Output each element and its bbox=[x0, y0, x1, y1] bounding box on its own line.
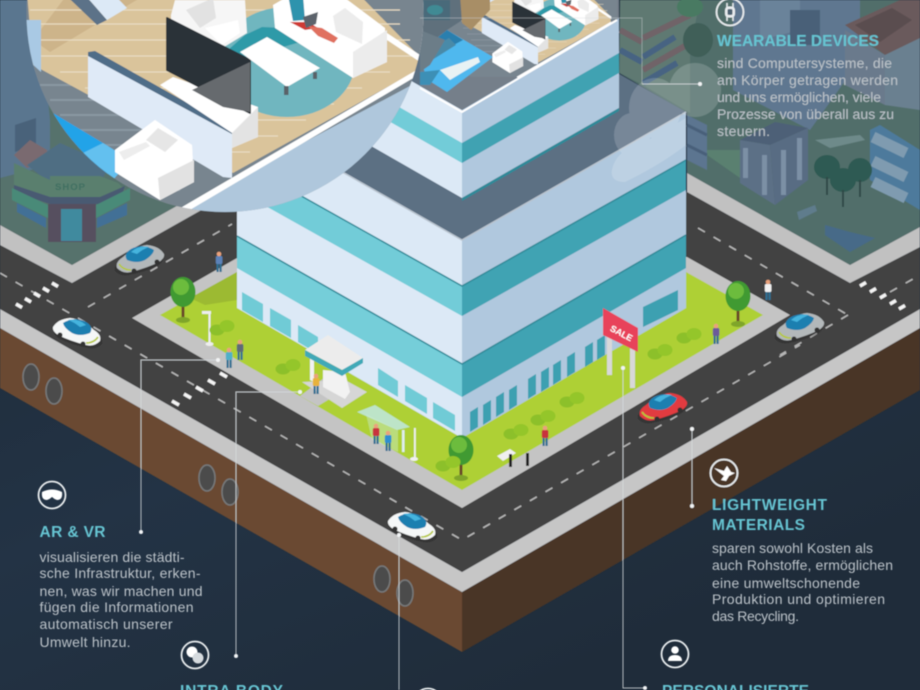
sale sign bbox=[603, 308, 638, 388]
panel: wearable devices text: und uns ermöglichen, viele bbox=[717, 89, 881, 105]
trees bbox=[170, 277, 750, 481]
underground pipes bbox=[23, 364, 413, 606]
main tower lower section bbox=[237, 0, 686, 438]
sale sign: SALE bbox=[608, 323, 634, 343]
icon: bird bbox=[710, 460, 738, 486]
panel: AR and VR text: sche Infrastruktur, erken- bbox=[40, 565, 201, 581]
bench and bollards bbox=[497, 449, 529, 467]
panel: AR and VR text bbox=[40, 524, 202, 650]
road network bbox=[0, 190, 920, 572]
panel: wearable devices text: WEARABLE DEVICES bbox=[717, 33, 879, 50]
panel: wearable devices text: am Körper getragen werden bbox=[717, 72, 898, 88]
panel: AR and VR text: AR & VR bbox=[40, 524, 106, 541]
panel: wearable devices text: steuern. bbox=[717, 123, 770, 139]
icon: partially visible circle bbox=[414, 688, 442, 690]
rooftop room miniature bbox=[420, 0, 612, 92]
panel: lightweight materials text: MATERIALS bbox=[712, 517, 805, 534]
leader lines bbox=[141, 84, 700, 690]
panel: AR and VR text: Umwelt hinzu. bbox=[40, 634, 130, 650]
road lane markings bbox=[0, 224, 920, 540]
leader dots bbox=[139, 82, 702, 690]
panel: AR and VR text: visualisieren die städti- bbox=[40, 549, 185, 565]
tower upper section bbox=[345, 0, 619, 201]
panel: lightweight materials text: sparen sowohl Kosten als bbox=[712, 540, 873, 556]
right foggy city block bbox=[619, 0, 920, 283]
panel: AR and VR text: automatisch unserer bbox=[40, 616, 173, 632]
left foggy city block bbox=[0, 0, 240, 283]
rooftop rim bbox=[420, 20, 617, 112]
drifting clouds bbox=[612, 63, 721, 182]
panel: AR and VR text: fügen die Informationen bbox=[40, 599, 194, 615]
panel: wearable devices text: sind Computersysteme, die bbox=[717, 55, 892, 71]
panel: wearable devices text bbox=[717, 33, 898, 139]
street lamp bbox=[202, 311, 214, 346]
central block pavement and lawn bbox=[132, 257, 790, 508]
cars bbox=[53, 245, 824, 542]
panel: lightweight materials text: Produktion und optimieren bbox=[712, 591, 885, 607]
bushes bbox=[210, 320, 702, 472]
people bbox=[216, 252, 771, 451]
panel: lightweight materials text: LIGHTWEIGHT bbox=[712, 497, 828, 514]
panel: lightweight materials text: auch Rohstoffe, ermöglichen bbox=[712, 557, 893, 573]
icon: intra body bbox=[182, 642, 208, 668]
panel: lightweight materials text: das Recycling. bbox=[712, 608, 799, 624]
wearable leader line bbox=[420, 18, 642, 84]
city block ground: earth cross-section bbox=[0, 309, 920, 652]
panel: lightweight materials text bbox=[712, 497, 893, 624]
icon: VR headset bbox=[38, 482, 66, 508]
tower windows bbox=[242, 290, 678, 432]
icon: person profile bbox=[662, 640, 688, 668]
panel: wearable devices text: Prozesse von überall aus zu bbox=[717, 106, 894, 122]
icon: smartwatch bbox=[716, 0, 744, 26]
panel: AR and VR text: nen, was wir machen und bbox=[40, 583, 202, 599]
panel: lightweight materials text: eine umweltschonende bbox=[712, 575, 860, 591]
magnifier lens with room detail bbox=[26, 0, 424, 213]
left foggy city block: SHOP bbox=[55, 182, 86, 193]
bus stop bbox=[357, 405, 418, 461]
lobby entrance bbox=[302, 335, 367, 408]
crosswalks bbox=[16, 282, 905, 405]
